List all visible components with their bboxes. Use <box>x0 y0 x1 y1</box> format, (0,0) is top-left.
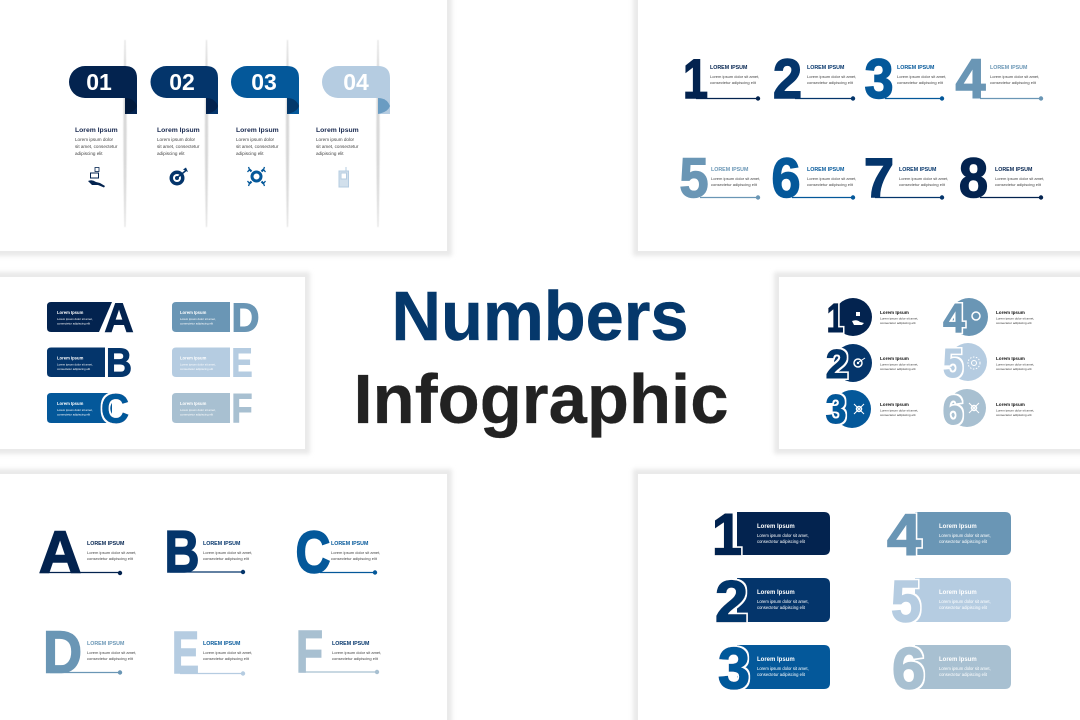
circle 5: Lorem ipsum dolor sit amet, <box>996 362 1034 366</box>
panel: numbered circles 1-6 <box>774 272 1080 454</box>
text block 2: sit amet, consectetur <box>157 144 200 149</box>
item 5: 5 <box>680 146 708 209</box>
circle 6: Lorem ipsum dolor sit amet, <box>996 408 1034 412</box>
card 4 <box>887 502 1011 568</box>
text block 4: adipiscing elit <box>316 151 344 156</box>
circle 6: Lorem Ipsum <box>996 402 1025 407</box>
tab 03 <box>231 66 299 114</box>
item F <box>296 619 381 685</box>
text block 3: sit amet, consectetur <box>236 144 279 149</box>
circle 5: consectetur adipiscing elit <box>996 367 1032 371</box>
card F: F <box>232 386 252 432</box>
card 3: consectetur adipiscing elit <box>757 672 806 677</box>
circle 2: consectetur adipiscing elit <box>880 367 916 371</box>
item 3: consectetur adipiscing elit <box>897 80 944 85</box>
card C: C <box>101 386 129 432</box>
card 1: 1 <box>712 502 742 568</box>
text block 4 <box>316 127 359 156</box>
panel: letters A-F with lines <box>0 469 452 720</box>
card C: Lorem Ipsum <box>57 401 84 406</box>
circle 1: Lorem Ipsum <box>880 310 909 315</box>
item 1: 1 <box>683 47 708 110</box>
circle 1: consectetur adipiscing elit <box>880 321 916 325</box>
card 4: 4 <box>887 502 921 568</box>
icon: target with arrow <box>170 168 188 186</box>
item 4: Lorem ipsum dolor sit amet, <box>990 74 1039 79</box>
card 3: Lorem Ipsum <box>757 657 795 663</box>
card E: Lorem ipsum dolor sit amet, <box>180 362 216 366</box>
item 4: 4 <box>956 47 986 110</box>
card 6: Lorem Ipsum <box>939 657 977 663</box>
panel: numbers 1-8 with lines <box>633 0 1080 256</box>
circle 4: Lorem ipsum dolor sit amet, <box>996 316 1034 320</box>
item 1 <box>683 47 760 110</box>
circle 5 <box>943 340 1034 386</box>
circle 3 <box>826 386 918 432</box>
item 6: consectetur adipiscing elit <box>807 182 854 187</box>
item 5: consectetur adipiscing elit <box>711 182 758 187</box>
card A: consectetur adipiscing elit <box>57 322 90 326</box>
circle 2: 2 <box>826 341 848 387</box>
item 3: Lorem ipsum dolor sit amet, <box>897 74 946 79</box>
item 2 <box>773 47 856 110</box>
circle 4: Lorem Ipsum <box>996 310 1025 315</box>
item 7: LOREM IPSUM <box>899 167 937 173</box>
circle 1: Lorem ipsum dolor sit amet, <box>880 316 918 320</box>
circle 5: 5 <box>943 340 963 386</box>
card 6 <box>892 636 1011 702</box>
card A: A <box>104 294 134 340</box>
item 3: LOREM IPSUM <box>897 65 935 71</box>
item 6: LOREM IPSUM <box>807 167 845 173</box>
text block 1: Lorem Ipsum <box>75 127 118 134</box>
card 2 <box>715 570 830 634</box>
circle 5: Lorem Ipsum <box>996 356 1025 361</box>
item 8: consectetur adipiscing elit <box>995 182 1042 187</box>
circle 1 <box>826 295 918 341</box>
item 6: 6 <box>772 146 800 209</box>
item E: LOREM IPSUM <box>203 641 241 647</box>
item D <box>43 620 136 686</box>
item D: D <box>43 620 82 686</box>
item D: consectetur adipiscing elit <box>87 656 134 661</box>
card 5: 5 <box>891 570 921 634</box>
text block 3: Lorem ipsum dolor <box>236 137 275 142</box>
tab 02 <box>150 66 218 114</box>
card B: Lorem Ipsum <box>57 356 84 360</box>
card 5: consectetur adipiscing elit <box>939 605 988 610</box>
tab 02: 02 <box>169 69 195 95</box>
title <box>354 277 728 438</box>
item F: Lorem ipsum dolor sit amet, <box>332 650 381 655</box>
item C: LOREM IPSUM <box>331 541 369 547</box>
icon: mobile phone <box>339 167 348 187</box>
item 5: LOREM IPSUM <box>711 167 749 173</box>
card A: Lorem ipsum dolor sit amet, <box>57 317 93 321</box>
text block 4: Lorem ipsum dolor <box>316 137 355 142</box>
panel: numbered tabs 01-04 <box>0 0 452 256</box>
card F: Lorem ipsum dolor sit amet, <box>180 408 216 412</box>
panel: letter cards A-F <box>0 272 310 454</box>
item A: LOREM IPSUM <box>87 541 125 547</box>
item 3: 3 <box>864 47 894 110</box>
icon: gear network <box>248 167 266 186</box>
card 2: Lorem Ipsum <box>757 590 795 596</box>
card 4: consectetur adipiscing elit <box>939 539 988 544</box>
card B: consectetur adipiscing elit <box>57 367 90 371</box>
text block 4: Lorem Ipsum <box>316 127 359 134</box>
card D: consectetur adipiscing elit <box>180 322 213 326</box>
title: Numbers <box>392 277 688 355</box>
text block 1 <box>75 127 118 156</box>
card E: E <box>232 340 252 386</box>
circle 4: consectetur adipiscing elit <box>996 321 1032 325</box>
tab 04 <box>322 66 390 114</box>
circle 4: 4 <box>943 295 965 341</box>
panel: numbered cards 1-6 <box>633 469 1080 720</box>
text block 1: Lorem ipsum dolor <box>75 137 114 142</box>
card 3: Lorem ipsum dolor sit amet, <box>757 666 809 671</box>
item E: E <box>172 620 199 686</box>
card F <box>172 386 252 432</box>
text block 3: adipiscing elit <box>236 151 264 156</box>
item F: consectetur adipiscing elit <box>332 656 379 661</box>
text block 1: sit amet, consectetur <box>75 144 118 149</box>
card B: B <box>106 340 132 386</box>
item 6 <box>772 146 856 209</box>
item 4: LOREM IPSUM <box>990 65 1028 71</box>
item B <box>164 519 252 585</box>
text block 1: adipiscing elit <box>75 151 103 156</box>
card 1: consectetur adipiscing elit <box>757 539 806 544</box>
item 5: Lorem ipsum dolor sit amet, <box>711 176 760 181</box>
card 6: consectetur adipiscing elit <box>939 672 988 677</box>
card 4: Lorem ipsum dolor sit amet, <box>939 533 991 538</box>
text block 3: Lorem Ipsum <box>236 127 279 134</box>
item 1: Lorem ipsum dolor sit amet, <box>710 74 759 79</box>
text block 3 <box>236 127 279 156</box>
card A <box>47 294 134 340</box>
item C: consectetur adipiscing elit <box>331 556 378 561</box>
item A: consectetur adipiscing elit <box>87 556 134 561</box>
item C: Lorem ipsum dolor sit amet, <box>331 550 380 555</box>
item 7: 7 <box>864 146 894 209</box>
item C <box>296 520 380 586</box>
item 1: LOREM IPSUM <box>710 65 748 71</box>
item A: Lorem ipsum dolor sit amet, <box>87 550 136 555</box>
icon: hand with money <box>88 168 105 188</box>
card D: Lorem Ipsum <box>180 310 207 315</box>
card 3: 3 <box>718 636 750 702</box>
card 1 <box>712 502 830 568</box>
item B: consectetur adipiscing elit <box>203 556 250 561</box>
card B <box>47 340 132 386</box>
item B: B <box>164 519 200 585</box>
item 4 <box>956 47 1043 110</box>
item 7: consectetur adipiscing elit <box>899 182 946 187</box>
circle 3: Lorem Ipsum <box>880 402 909 407</box>
card C: consectetur adipiscing elit <box>57 412 90 416</box>
item F: LOREM IPSUM <box>332 641 370 647</box>
item B: Lorem ipsum dolor sit amet, <box>203 550 252 555</box>
item 7: Lorem ipsum dolor sit amet, <box>899 176 948 181</box>
card 4: Lorem Ipsum <box>939 524 977 530</box>
tab 03: 03 <box>251 69 277 95</box>
item E: consectetur adipiscing elit <box>203 656 250 661</box>
item E <box>172 620 252 686</box>
card 6: Lorem ipsum dolor sit amet, <box>939 666 991 671</box>
item 3 <box>864 47 946 110</box>
circle 2 <box>826 341 918 387</box>
item 2: 2 <box>773 47 802 110</box>
card E: consectetur adipiscing elit <box>180 367 213 371</box>
tab 01: 01 <box>86 69 112 95</box>
card D: D <box>232 294 260 340</box>
card 1: Lorem Ipsum <box>757 524 795 530</box>
circle 4 <box>943 295 1034 341</box>
text block 2 <box>157 127 200 156</box>
item B: LOREM IPSUM <box>203 541 241 547</box>
card C <box>47 386 129 432</box>
card D: Lorem ipsum dolor sit amet, <box>180 317 216 321</box>
text block 2: Lorem ipsum dolor <box>157 137 196 142</box>
item A <box>39 520 136 586</box>
item D: LOREM IPSUM <box>87 641 125 647</box>
card B: Lorem ipsum dolor sit amet, <box>57 362 93 366</box>
circle 6: consectetur adipiscing elit <box>996 413 1032 417</box>
card 1: Lorem ipsum dolor sit amet, <box>757 533 809 538</box>
circle 2: Lorem Ipsum <box>880 356 909 361</box>
circle 2: Lorem ipsum dolor sit amet, <box>880 362 918 366</box>
item 8: Lorem ipsum dolor sit amet, <box>995 176 1044 181</box>
text block 2: Lorem Ipsum <box>157 127 200 134</box>
circle 3: consectetur adipiscing elit <box>880 413 916 417</box>
circle 1: 1 <box>826 295 844 341</box>
tab 01 <box>69 66 137 114</box>
item 2: consectetur adipiscing elit <box>807 80 854 85</box>
card D <box>172 294 260 340</box>
circle 6: 6 <box>942 387 964 433</box>
circle 3: 3 <box>826 386 846 432</box>
item E: Lorem ipsum dolor sit amet, <box>203 650 252 655</box>
card A: Lorem Ipsum <box>57 310 84 315</box>
item 4: consectetur adipiscing elit <box>990 80 1037 85</box>
title: Infographic <box>354 360 728 438</box>
item 8: LOREM IPSUM <box>995 167 1033 173</box>
card 2: consectetur adipiscing elit <box>757 605 806 610</box>
card 2: 2 <box>715 570 748 634</box>
text block 4: sit amet, consectetur <box>316 144 359 149</box>
circle 6 <box>942 387 1034 433</box>
item C: C <box>296 520 330 586</box>
text block 2: adipiscing elit <box>157 151 185 156</box>
item 5 <box>680 146 760 209</box>
card E <box>172 340 252 386</box>
card 5: Lorem ipsum dolor sit amet, <box>939 599 991 604</box>
item F: F <box>296 619 323 685</box>
circle 3: Lorem ipsum dolor sit amet, <box>880 408 918 412</box>
item 7 <box>864 146 948 209</box>
card 3 <box>718 636 830 702</box>
item 6: Lorem ipsum dolor sit amet, <box>807 176 856 181</box>
card C: Lorem ipsum dolor sit amet, <box>57 408 93 412</box>
item 2: LOREM IPSUM <box>807 65 845 71</box>
item 1: consectetur adipiscing elit <box>710 80 757 85</box>
card 6: 6 <box>892 636 925 702</box>
card 2: Lorem ipsum dolor sit amet, <box>757 599 809 604</box>
card F: Lorem Ipsum <box>180 401 207 406</box>
item D: Lorem ipsum dolor sit amet, <box>87 650 136 655</box>
item A: A <box>39 520 81 586</box>
item 2: Lorem ipsum dolor sit amet, <box>807 74 856 79</box>
card E: Lorem Ipsum <box>180 356 207 360</box>
card 5 <box>891 570 1011 634</box>
card F: consectetur adipiscing elit <box>180 412 213 416</box>
tab 04: 04 <box>343 69 369 95</box>
card 5: Lorem Ipsum <box>939 590 977 596</box>
item 8: 8 <box>959 146 988 209</box>
item 8 <box>959 146 1044 209</box>
